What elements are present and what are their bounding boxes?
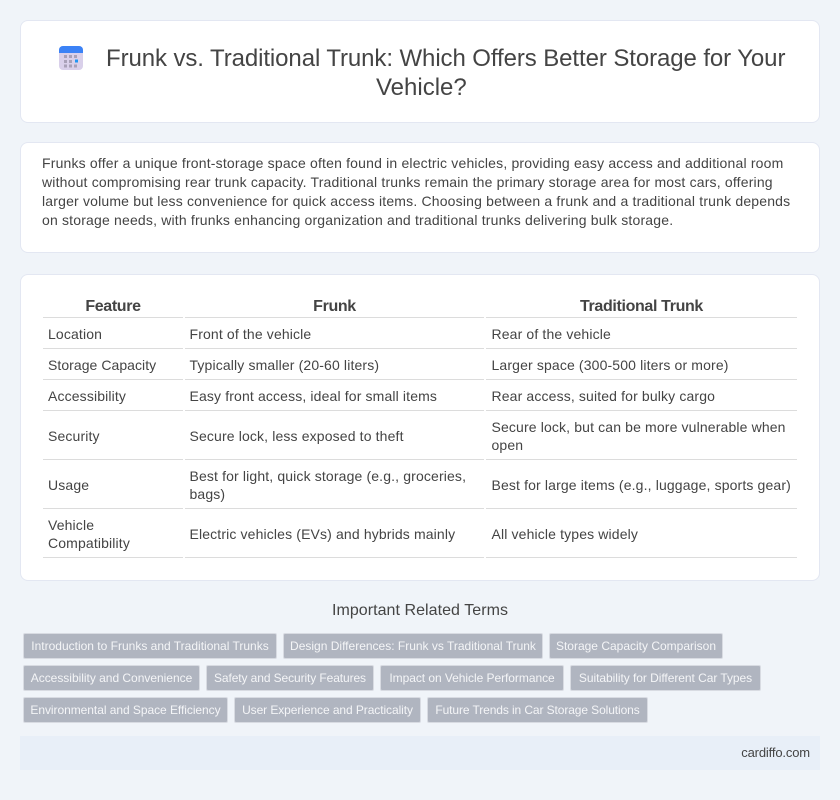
table rows: open bbox=[492, 437, 523, 453]
related terms tags: Introduction to Frunks and Traditional Trunks bbox=[31, 639, 269, 653]
table rows: All vehicle types widely bbox=[492, 526, 638, 542]
table rows: Compatibility bbox=[48, 535, 130, 551]
related terms tags: Environmental and Space Efficiency bbox=[30, 703, 221, 717]
table rows bbox=[43, 317, 797, 558]
table rows: Vehicle bbox=[48, 517, 94, 533]
column headers: Frunk bbox=[313, 298, 356, 315]
description text bbox=[42, 155, 790, 228]
table rows: Front of the vehicle bbox=[190, 326, 311, 342]
icon: calendar bbox=[59, 46, 83, 70]
column headers bbox=[85, 298, 704, 315]
footer source: cardiffo.com bbox=[741, 745, 810, 760]
related terms heading: Important Related Terms bbox=[332, 602, 508, 619]
table rows: Secure lock, but can be more vulnerable when bbox=[492, 419, 786, 435]
description text: Frunks offer a unique front-storage space often found in electric vehicles, providing easy access and additional room bbox=[42, 155, 783, 171]
related terms tags: Suitability for Different Car Types bbox=[579, 671, 752, 685]
table rows: Security bbox=[48, 428, 100, 444]
table rows: Typically smaller (20-60 liters) bbox=[190, 357, 379, 373]
title bbox=[106, 45, 786, 101]
header panel: Vehicle? bbox=[376, 74, 467, 101]
related terms tags: User Experience and Practicality bbox=[242, 703, 413, 717]
related terms tags bbox=[23, 633, 761, 723]
column headers: Feature bbox=[85, 298, 141, 315]
description text: without compromising rear trunk capacity. Traditional trunks remain the primary storage area for most cars, offering bbox=[42, 174, 773, 190]
related terms tags: Storage Capacity Comparison bbox=[556, 639, 716, 653]
table rows: Storage Capacity bbox=[48, 357, 156, 373]
footer bar bbox=[20, 736, 820, 770]
panel: comparison table bbox=[20, 274, 820, 581]
table rows: Location bbox=[48, 326, 102, 342]
table rows: Accessibility bbox=[48, 388, 126, 404]
description text: on storage needs, with frunks enhancing organization and traditional trunks delivering bulk storage. bbox=[42, 212, 673, 228]
header panel: Frunk vs. Traditional Trunk: Which Offers Better Storage for Your bbox=[106, 45, 785, 72]
column headers: Traditional Trunk bbox=[580, 298, 703, 315]
related terms tags: Accessibility and Convenience bbox=[31, 671, 192, 685]
table rows: Secure lock, less exposed to theft bbox=[190, 428, 404, 444]
related terms tags: Future Trends in Car Storage Solutions bbox=[435, 703, 640, 717]
table rows: Best for large items (e.g., luggage, sports gear) bbox=[492, 477, 791, 493]
table rows: Electric vehicles (EVs) and hybrids mainly bbox=[190, 526, 455, 542]
header panel bbox=[20, 20, 820, 123]
table rows: Usage bbox=[48, 477, 89, 493]
description panel bbox=[20, 142, 820, 253]
table rows: Best for light, quick storage (e.g., groceries, bbox=[190, 468, 466, 484]
related terms tags: Design Differences: Frunk vs Traditional Trunk bbox=[290, 639, 536, 653]
description text: larger volume but less convenience for quick access items. Choosing between a frunk and a traditional trunk depends bbox=[42, 193, 790, 209]
table rows: bags) bbox=[190, 486, 225, 502]
table rows: Larger space (300-500 liters or more) bbox=[492, 357, 729, 373]
table rows: Easy front access, ideal for small items bbox=[190, 388, 437, 404]
table rows: Rear of the vehicle bbox=[492, 326, 611, 342]
related terms tags: Safety and Security Features bbox=[214, 671, 366, 685]
table rows: Rear access, suited for bulky cargo bbox=[492, 388, 715, 404]
related terms tags: Impact on Vehicle Performance bbox=[389, 671, 555, 685]
